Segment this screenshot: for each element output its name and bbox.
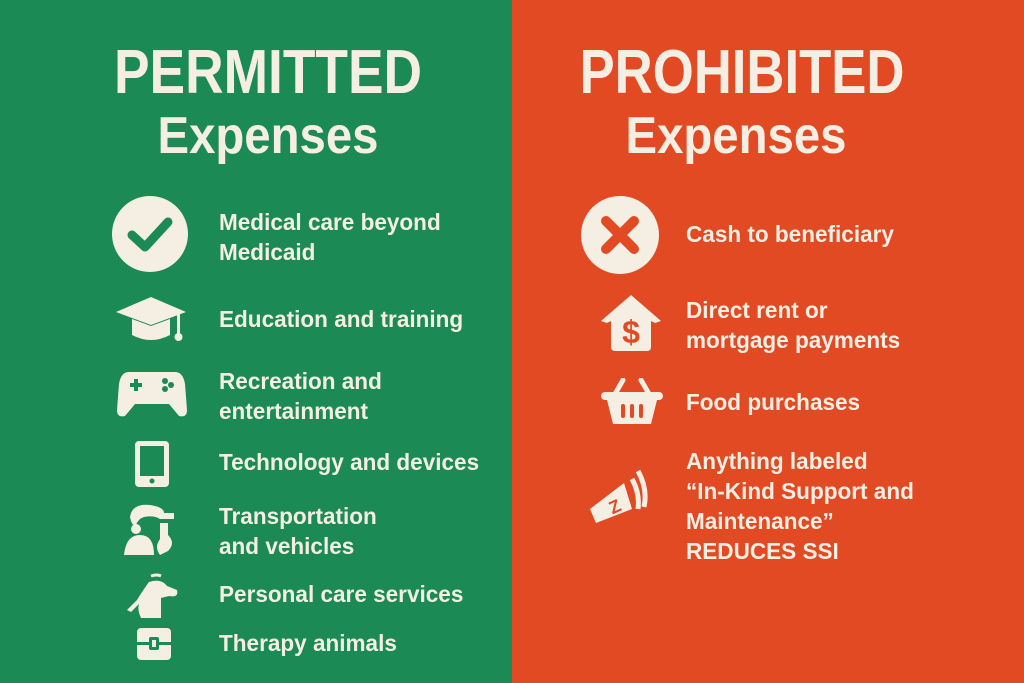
text: in-kind	[686, 448, 914, 564]
panel: permitted	[0, 0, 512, 683]
icon: person	[124, 504, 174, 555]
text: medical	[219, 209, 441, 265]
text: transportation: Transportation	[219, 503, 377, 529]
text: rent: mortgage payments	[686, 327, 900, 353]
text: technology: Technology and devices	[219, 449, 479, 475]
text: therapy: Therapy animals	[219, 630, 397, 656]
title: permitted: PERMITTED	[114, 38, 422, 107]
text: in-kind: Anything labeled	[686, 448, 868, 474]
icon: check	[112, 196, 188, 272]
text: cash: Cash to beneficiary	[686, 221, 894, 247]
text: in-kind: REDUCES SSI	[686, 538, 839, 564]
text: medical: Medical care beyond	[219, 209, 441, 235]
icon: gamepad	[117, 372, 187, 416]
text: transportation	[219, 503, 377, 559]
icon: grad cap	[116, 297, 186, 341]
icon: money	[590, 470, 648, 523]
icon: house: $	[622, 314, 640, 350]
icon: dog	[127, 574, 178, 618]
text: personal care: Personal care services	[219, 581, 463, 607]
icon: basket	[601, 378, 663, 424]
text: food: Food purchases	[686, 389, 860, 415]
text: recreation: entertainment	[219, 398, 368, 424]
text: in-kind: “In-Kind Support and	[686, 478, 914, 504]
text: medical: Medicaid	[219, 239, 315, 265]
text: transportation: and vehicles	[219, 533, 354, 559]
icon: house	[601, 295, 661, 351]
text: recreation	[219, 368, 382, 424]
text: in-kind: Maintenance”	[686, 508, 834, 534]
panel: prohibited	[512, 0, 1024, 683]
text: rent	[686, 297, 900, 353]
title: prohibited: PROHIBITED	[579, 38, 904, 107]
text: recreation: Recreation and	[219, 368, 382, 394]
text: education: Education and training	[219, 306, 463, 332]
icon: money: Z	[606, 495, 624, 518]
subtitle: expenses: Expenses	[626, 107, 846, 165]
subtitle: expenses: Expenses	[158, 107, 378, 165]
icon: kit	[137, 628, 171, 660]
icon: tablet	[135, 441, 169, 487]
icon: x	[581, 196, 659, 274]
text: rent: Direct rent or	[686, 297, 828, 323]
